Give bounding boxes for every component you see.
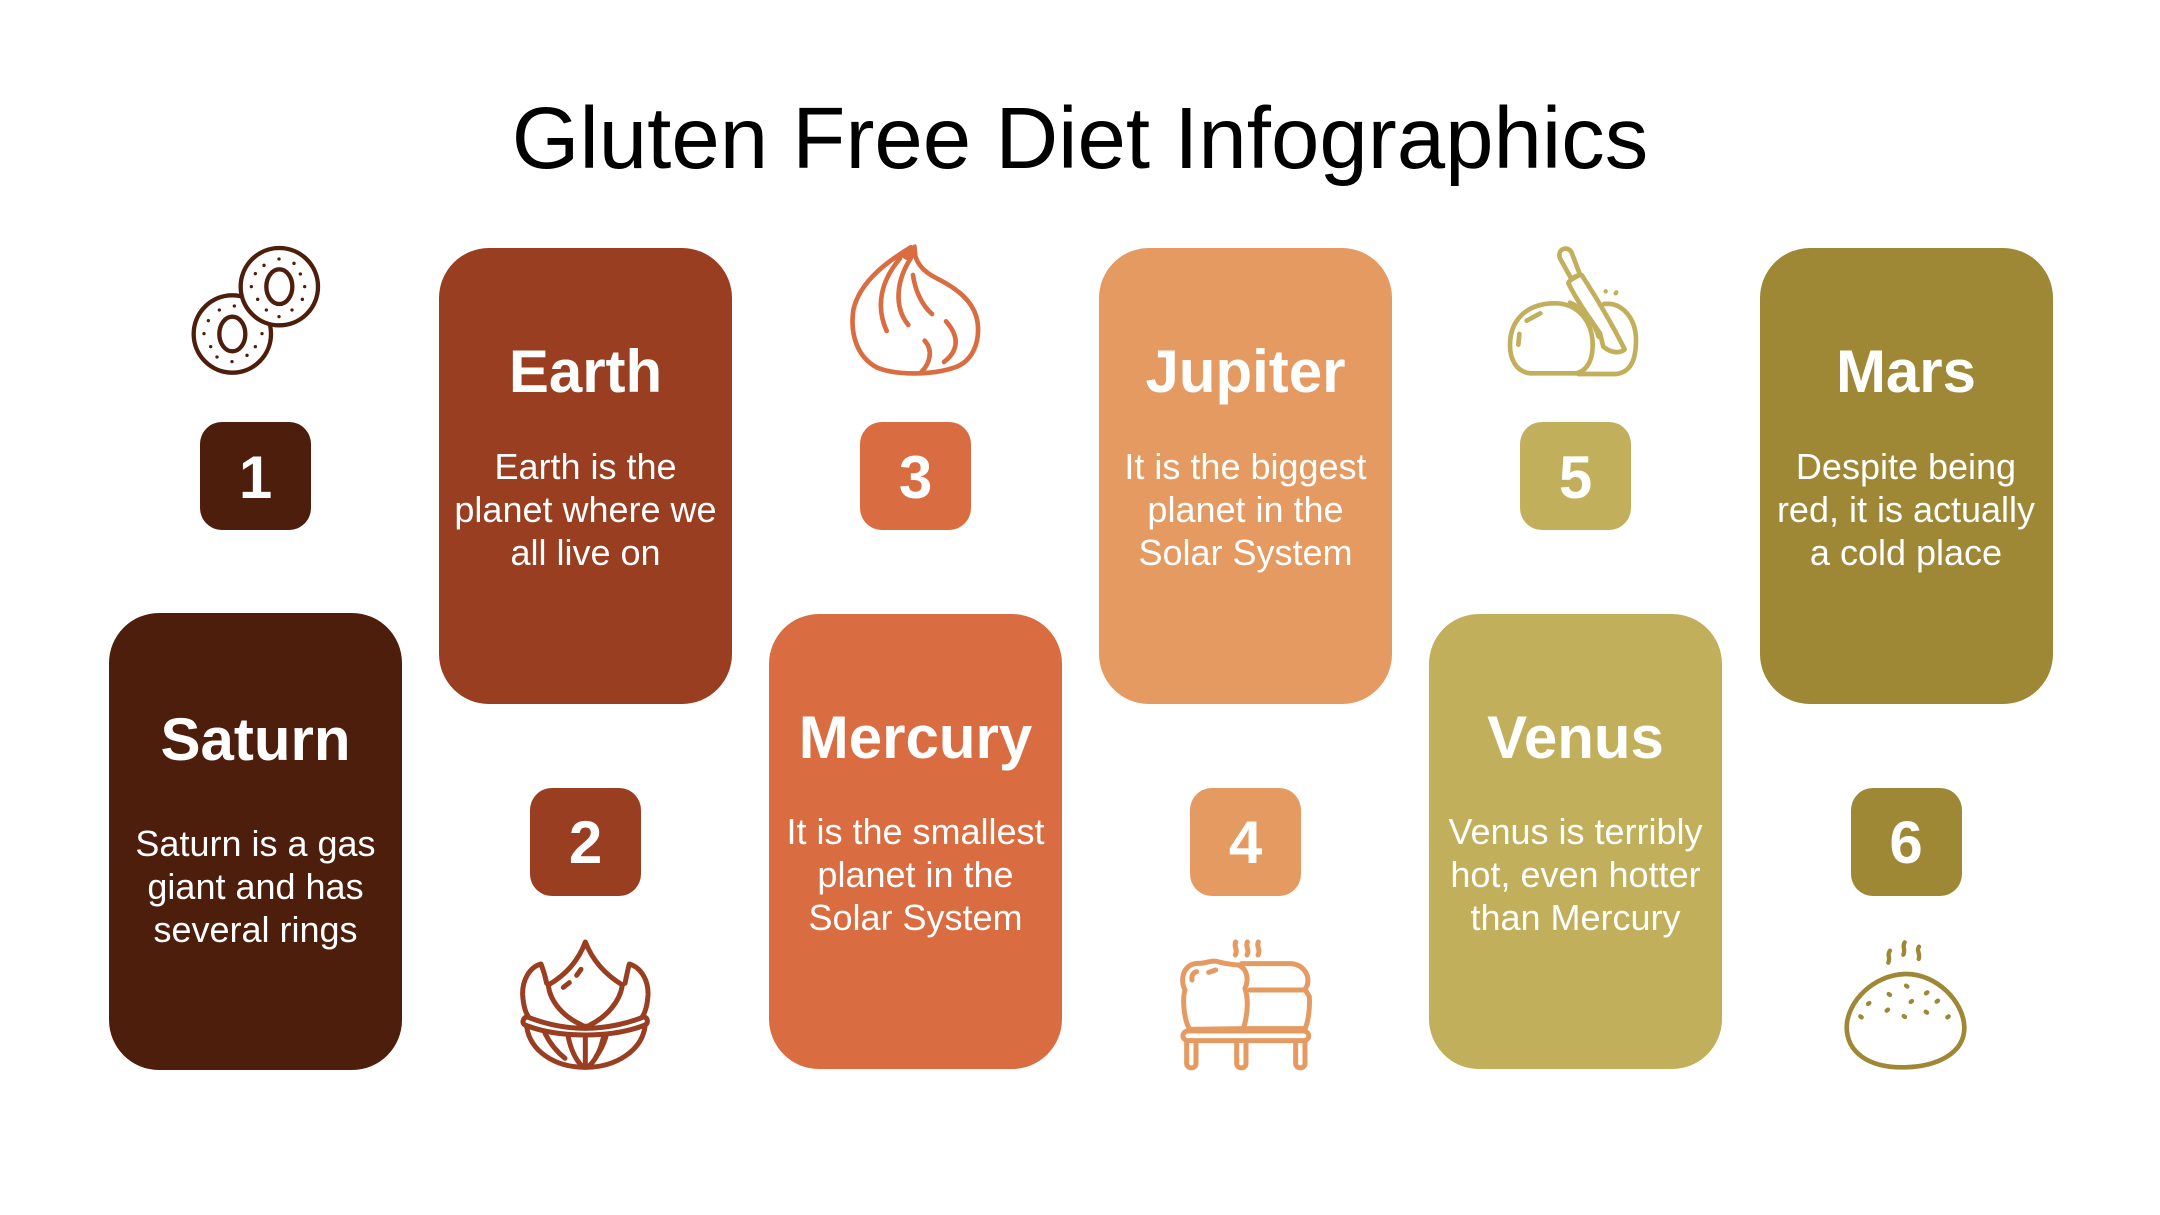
text: Saturn description: giant and has [147, 866, 364, 907]
text: Saturn description: several rings [153, 909, 358, 950]
text: Jupiter description: It is the biggest [1124, 446, 1367, 487]
text: Venus description: hot, even hotter [1450, 854, 1701, 895]
heading: Saturn: Saturn [160, 706, 351, 773]
text: Earth description: planet where we [454, 489, 717, 530]
heading: Earth: Earth [509, 338, 662, 405]
heading: Mercury: Mercury [799, 704, 1032, 771]
number badge 1: 1 [239, 444, 272, 511]
panel: Saturn [109, 613, 402, 1070]
panel: Earth [439, 248, 732, 704]
number badge 2: 2 [569, 809, 602, 876]
icon: two donuts [192, 246, 320, 375]
text: Saturn description [135, 823, 376, 950]
number badge 5 [1520, 422, 1631, 530]
text: Venus description [1448, 811, 1703, 938]
panel: Jupiter [1099, 248, 1392, 704]
title: Gluten Free Diet Infographics [512, 90, 1648, 187]
heading: Mars: Mars [1836, 338, 1976, 405]
text: Mercury description: It is the smallest [786, 811, 1045, 852]
number badge 5: 5 [1559, 444, 1592, 511]
icon: bread and knife [1508, 246, 1638, 376]
heading: Jupiter: Jupiter [1145, 338, 1346, 405]
text: Earth description: Earth is the [494, 446, 677, 487]
number badge 6: 6 [1889, 809, 1923, 876]
text: Mercury description [786, 811, 1045, 938]
number badge 2 [530, 788, 641, 896]
number badge 6 [1850, 788, 1962, 896]
text: Earth description: all live on [510, 532, 661, 573]
text: Mars description: Despite being [1796, 446, 2016, 487]
icon: dumpling [850, 244, 980, 376]
heading: Venus: Venus [1487, 704, 1664, 771]
text: Jupiter description: planet in the [1147, 489, 1344, 530]
number badge 1 [200, 422, 311, 530]
text: Mars description [1777, 446, 2035, 573]
number badge 3 [860, 422, 971, 530]
text: Jupiter description [1124, 446, 1367, 573]
number badge 3: 3 [899, 444, 932, 511]
text: Mars description: red, it is actually [1777, 489, 2035, 530]
text: Jupiter description: Solar System [1138, 532, 1353, 573]
panel: Mercury [769, 614, 1062, 1069]
number badge 4: 4 [1229, 809, 1262, 876]
text: Venus description: than Mercury [1470, 897, 1681, 938]
text: Mercury description: planet in the [817, 854, 1014, 895]
text: Venus description: Venus is terribly [1448, 811, 1703, 852]
panel: Venus [1429, 614, 1722, 1069]
icon: steaming bun [1844, 940, 1967, 1070]
text: Saturn description: Saturn is a gas [135, 823, 376, 864]
text: Mercury description: Solar System [808, 897, 1023, 938]
text: Earth description [454, 446, 717, 573]
number badge 4 [1190, 788, 1301, 896]
icon: samosa in basket [520, 940, 651, 1070]
icon: bread loaves on rack [1180, 940, 1312, 1070]
panel: Mars [1760, 248, 2052, 704]
text: Mars description: a cold place [1810, 532, 2002, 573]
